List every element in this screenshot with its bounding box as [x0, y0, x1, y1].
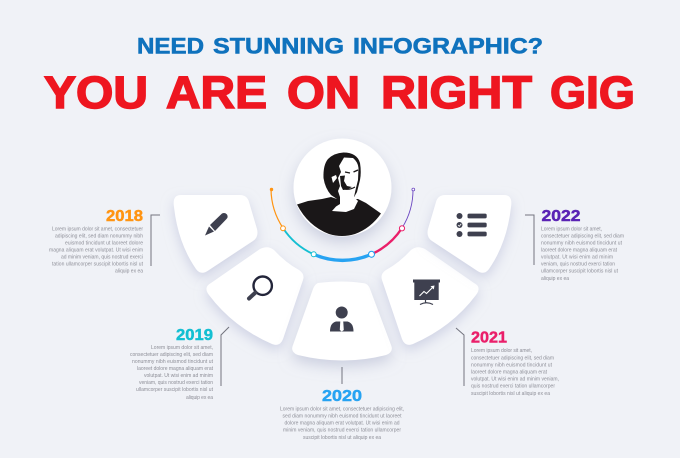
text block: 2020: 2020 — [322, 388, 362, 405]
icon: pencil — [205, 213, 228, 236]
title: you are on right gig: ARE — [166, 67, 267, 118]
text block: 2018: tation ullamcorper suscipit lobortis nisl ut — [52, 262, 144, 268]
text block: 2022: aliquip ex ea — [541, 276, 569, 282]
text block: 2019: veniam, quis nostrud exerci tation — [139, 380, 213, 386]
text block: 2019: consectetuer adipiscing elit, sed diam — [130, 352, 213, 358]
text block: 2021: suscipit lobortis nisl ut aliquip ex ea — [471, 391, 550, 397]
icon: presentation board — [413, 280, 440, 304]
heading: need stunning infographic: NEED — [137, 34, 204, 58]
title: you are on right gig: ON — [287, 67, 360, 118]
connector: 2021 — [456, 328, 464, 386]
arc timeline — [270, 188, 415, 260]
text block: 2021: volutpat. Ut wisi enim ad minim veniam, — [471, 376, 559, 382]
text block: 2021: quis nostrud exerci tation ullamcorper — [471, 384, 555, 390]
text block: 2022: volutpat. Ut wisi enim ad minim — [541, 254, 613, 260]
panel: 2022 card — [428, 195, 511, 273]
text block: 2018 — [49, 208, 144, 274]
text block: 2021: 2021 — [471, 330, 507, 346]
title: you are on right gig: YOU — [44, 67, 148, 118]
connector: 2020 — [341, 367, 343, 384]
panel: 2020 card — [292, 282, 392, 360]
text block: 2018: adipiscing elit, sed diam nonummy nibh — [55, 234, 143, 240]
text block: 2021 — [471, 330, 559, 397]
text block: 2018: ad minim veniam, quis nostrud exerci — [61, 254, 143, 260]
text block: 2018: magna aliquam erat volutpat. Ut wisi enim — [49, 248, 143, 254]
text block: 2020: suscipit lobortis nisl ut aliquip ex ea — [303, 435, 381, 441]
title: you are on right gig: RIGHT — [381, 67, 532, 118]
text block: 2019: 2019 — [176, 327, 213, 344]
text block: 2018: 2018 — [106, 208, 143, 225]
icon: magnifier — [249, 276, 272, 298]
text block: 2021: Lorem ipsum dolor sit amet, — [471, 348, 532, 354]
connector: 2019 — [221, 327, 229, 386]
text block: 2019: aliquip ex ea — [186, 395, 213, 401]
panel: 2019 card — [206, 247, 304, 345]
text block: 2021: laoreet dolore magna aliquam erat — [471, 370, 548, 376]
text block: 2022 — [541, 208, 624, 282]
text block: 2019: volutpat. Ut wisi enim ad minim — [144, 373, 213, 379]
title: you are on right gig: GIG — [550, 67, 635, 118]
text block: 2022: Lorem ipsum dolor sit amet, — [541, 226, 602, 232]
icon: business person — [330, 306, 354, 332]
text block: 2021: nonummy nibh euismod tincidunt ut — [471, 362, 553, 368]
text block: 2019: Lorem ipsum dolor sit amet, — [151, 345, 213, 351]
heading: need stunning infographic — [137, 34, 543, 58]
icon: checklist — [456, 213, 487, 237]
text block: 2020: minim veniam, quis nostrud exerci tation ullamcorper — [283, 428, 401, 434]
text block: 2021: consectetuer adipiscing elit, sed diam — [471, 356, 554, 362]
connector: 2022 — [525, 215, 534, 265]
text block: 2018: Lorem ipsum dolor sit amet, consectetuer — [52, 226, 143, 232]
text block: 2019: ullamcorper suscipit lobortis nisl ut — [136, 387, 214, 393]
text block: 2018: euismod tincidunt ut laoreet dolore — [65, 240, 143, 246]
text block: 2022: veniam, quis nostrud exerci tation — [541, 262, 615, 268]
panel: 2018 card — [174, 195, 258, 273]
connector: 2018 — [151, 215, 160, 266]
text block: 2022: 2022 — [542, 208, 580, 225]
text block: 2019: nonummy nibh euismod tincidunt ut — [132, 359, 214, 365]
portrait — [294, 138, 392, 236]
text block: 2020: Lorem ipsum dolor sit amet, consectetuer adipiscing elit, — [280, 406, 404, 412]
text block: 2019 — [130, 327, 214, 401]
text block: 2020: sed diam nonummy nibh euismod tincidunt ut laoreet — [282, 414, 402, 420]
heading: need stunning infographic: STUNNING — [213, 34, 344, 58]
panel: 2021 card — [382, 247, 479, 345]
text block: 2022: ullamcorper suscipit lobortis nisl ut — [541, 268, 619, 274]
text block: 2018: aliquip ex ea — [115, 268, 143, 274]
text block: 2022: laoreet dolore magna aliquam erat — [541, 248, 618, 254]
text block: 2022: consectetuer adipiscing elit, sed diam — [541, 234, 624, 240]
text block: 2020: dolore magna aliquam erat volutpat. Ut wisi enim ad — [284, 420, 400, 426]
text block: 2019: laoreet dolore magna aliquam erat — [137, 366, 214, 372]
text block: 2022: nonummy nibh euismod tincidunt ut — [541, 240, 623, 246]
title: you are on right gig — [44, 67, 635, 118]
text block: 2020 — [280, 388, 404, 441]
heading: need stunning infographic: INFOGRAPHIC? — [353, 34, 543, 58]
